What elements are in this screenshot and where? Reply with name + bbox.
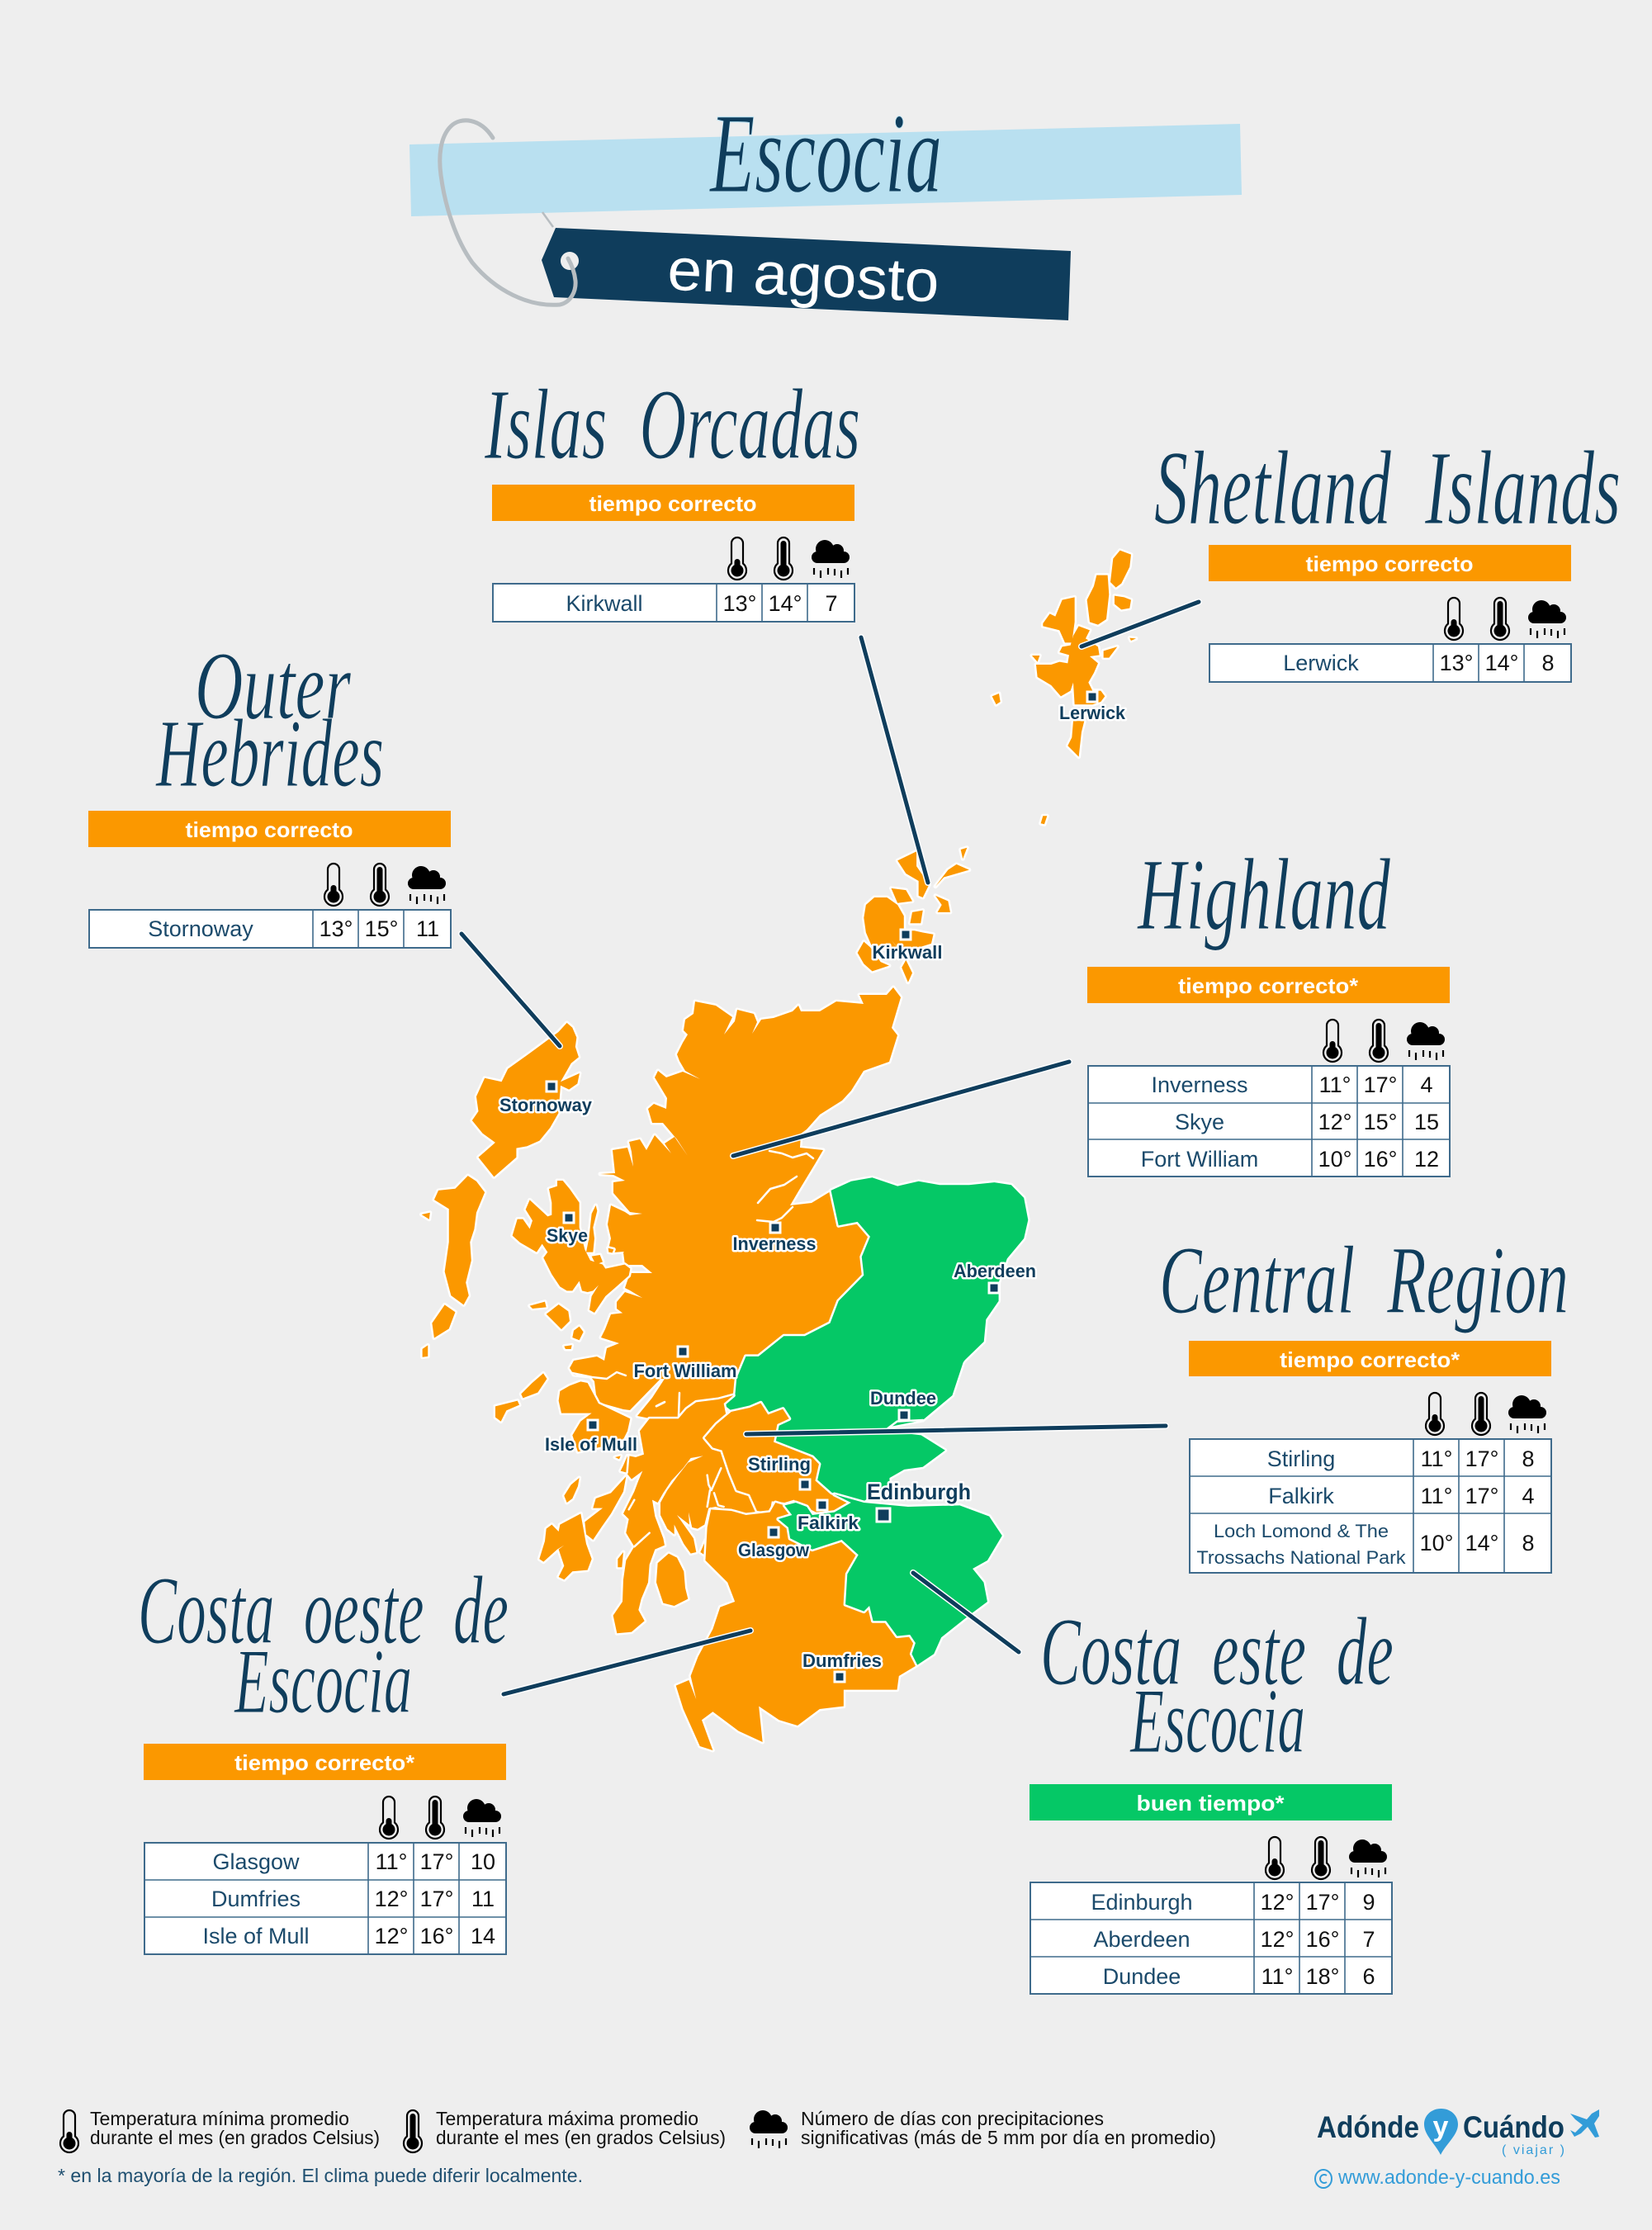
panel body: Islas Orcadas [492,485,854,622]
climate table [89,910,451,948]
label: Isle of Mull: Isle of Mull [545,1434,637,1455]
tag string short piece [542,212,553,227]
climate table: 13° [320,916,353,941]
status text: tiempo correcto* [1280,1347,1460,1372]
climate table: 12° [1261,1890,1294,1915]
climate table: 13° [723,591,756,616]
climate table: 7 [1362,1927,1375,1952]
status bar [492,485,854,521]
icon: maximum temperature [426,1797,444,1839]
climate table: 4 [1420,1072,1433,1097]
climate table: Loch Lomond & The [1214,1521,1389,1541]
icon: rain cloud [1508,1395,1546,1433]
connector: Central Region [746,1426,1166,1434]
climate table: 11° [1261,1964,1293,1989]
panel body: Central Region [1189,1341,1551,1573]
Outer Hebrides islands [422,1023,580,1357]
status bar [1209,545,1571,581]
status text: tiempo correcto* [1178,973,1359,998]
region: Shetland islands [992,551,1136,824]
panel: Shetland Islands [1154,429,1621,682]
panel: Highland [1087,838,1450,1177]
status text: buen tiempo* [1136,1791,1285,1816]
climate table: 14 [471,1924,495,1948]
climate table: 17° [420,1887,453,1911]
icon: maximum temperature [1312,1837,1330,1879]
climate table: Fort William [1141,1147,1258,1172]
climate table: 11° [1421,1484,1452,1508]
climate table: 6 [1362,1964,1375,1989]
tag: dark navy label [542,228,1071,320]
logo tagline: ( viajar ) [1502,2143,1564,2157]
title block [409,90,1242,320]
icon: rain cloud [408,866,446,904]
Islands: Mull, Colonsay, Jura, Islay, Gigha, Arran, Bute [539,1381,708,1606]
marker: Dundee [899,1410,909,1420]
icon: rain cloud [812,540,850,578]
region: Highland mainland [570,987,901,1418]
climate table: 7 [825,591,838,616]
climate table: 10 [471,1849,495,1874]
status text: tiempo correcto [589,491,756,516]
marker: Edinburgh [877,1508,890,1522]
label: Inverness: Inverness [733,1233,816,1254]
panel: Central Region [1159,1226,1569,1573]
status text: tiempo correcto* [234,1750,415,1775]
icon: rain cloud [463,1799,501,1837]
label: Stirling: Stirling [748,1454,811,1475]
climate table: 17° [1364,1072,1397,1097]
climate table: 12° [1261,1927,1294,1952]
title ribbon: light blue [409,124,1242,216]
climate table: 15 [1414,1110,1439,1134]
climate table: 8 [1522,1531,1535,1555]
icon: minimum temperature [380,1797,398,1839]
icon: rain cloud [1528,600,1566,638]
status bar [144,1744,506,1780]
connector: Costa oeste [504,1631,750,1694]
marker: Falkirk [817,1500,827,1510]
climate table: 12° [1318,1110,1351,1134]
heading: Costa este de: Costa este de [1040,1598,1394,1706]
Firth of Tay [888,1420,923,1428]
label: Stornoway: Stornoway [499,1095,593,1115]
label: Skye: Skye [547,1225,588,1246]
climate table: 16° [420,1924,453,1948]
climate table: 18° [1306,1964,1339,1989]
icon: maximum temperature [371,864,389,906]
footnote: * en la mayoría de la región. El clima puede diferir localmente. [58,2165,583,2186]
climate table: 11° [1421,1446,1452,1471]
climate table: 15° [365,916,398,941]
panel body: Shetland Islands [1209,545,1571,682]
panel body: Outer Hebrides [88,811,451,948]
icon: minimum temperature [1426,1393,1444,1435]
panel: Islas Orcadas [484,369,860,622]
marker: Aberdeen [989,1283,999,1293]
east coast region, north (green) [724,1177,1028,1501]
climate table: Falkirk [1268,1484,1334,1508]
icon: maximum temperature [1370,1020,1388,1062]
marker: Inverness [770,1223,780,1233]
heading: Escocia: Escocia [234,1631,412,1733]
legend text: maximum: Temperatura máxima promedio [436,2108,698,2129]
climate table [1209,644,1571,682]
icon: maximum temperature [774,537,793,580]
marker: Dumfries [835,1672,845,1682]
label: Aberdeen: Aberdeen [954,1261,1036,1281]
icon: minimum temperature [60,2110,78,2152]
climate table [1030,1882,1392,1994]
connector: Highland [733,1062,1069,1156]
climate table: Lerwick [1283,651,1359,675]
region: Argyll and Inner Hebrides [539,1381,772,1633]
icon: maximum temperature [404,2110,422,2152]
climate table: 11 [416,916,439,941]
heading: Highland: Highland [1137,838,1391,951]
icon: airplane [1570,2109,1599,2138]
subtitle: en agosto: en agosto [666,237,940,315]
marker: Stornoway [547,1082,556,1091]
climate table: Kirkwall [566,591,643,616]
climate table: Dumfries [211,1887,301,1911]
icon: minimum temperature [1323,1020,1342,1062]
marker: Isle of Mull [588,1420,598,1430]
status bar [1030,1784,1392,1820]
logo word: Adónde: Adónde [1317,2110,1419,2144]
panel body: Costa oeste [144,1744,506,1954]
marker: Skye [564,1213,574,1223]
climate table [493,584,854,622]
climate table: 13° [1440,651,1473,675]
label: Glasgow: Glasgow [738,1540,810,1560]
label: Lerwick: Lerwick [1059,703,1126,723]
panel: Outer Hebrides [88,632,451,948]
climate table: 16° [1306,1927,1339,1952]
climate table: 14° [769,591,802,616]
region: Skye and small isles [513,1181,630,1349]
climate table: 10° [1420,1531,1453,1555]
legend text: rain days: significativas (más de 5 mm por día en promedio) [801,2127,1216,2148]
icon: minimum temperature [1266,1837,1284,1879]
status bar [1087,967,1450,1003]
heading: Hebrides: Hebrides [155,699,384,807]
connector: Shetland Islands [1082,602,1199,646]
marker: Lerwick [1087,692,1097,702]
panel body: Highland [1087,967,1450,1177]
heading: Outer: Outer [195,632,352,740]
climate table: 17° [1465,1446,1498,1471]
status text: tiempo correcto [1306,552,1473,576]
climate table: 14° [1485,651,1518,675]
icon: rain cloud [1349,1839,1387,1877]
climate table: 17° [1306,1890,1339,1915]
climate table: 8 [1522,1446,1535,1471]
climate table: 17° [1465,1484,1498,1508]
icon: map pin with y [1424,2109,1458,2155]
climate table: Glasgow [212,1849,300,1874]
climate table: Stornoway [148,916,253,941]
Orkney islands [858,848,969,982]
icon: rain cloud [1407,1022,1445,1060]
climate table: Inverness [1151,1072,1248,1097]
legend [58,2108,1216,2186]
firths and sea lochs [572,1151,813,1416]
label: Kirkwall: Kirkwall [872,942,943,963]
label: Dundee: Dundee [870,1388,936,1409]
status bar [1189,1341,1551,1376]
Tiree and Coll [495,1373,547,1422]
climate table: 4 [1522,1484,1535,1508]
climate table: Aberdeen [1093,1927,1190,1952]
icon: minimum temperature [1445,598,1463,640]
region: central and southern Scotland [495,1373,1002,1750]
marker: Fort William [678,1347,688,1356]
marker: Stirling [800,1480,810,1489]
Argyll inner lochs [629,1402,724,1546]
panel: Costa oeste de Escocia [138,1556,509,1954]
region: Orkney and Outer Hebrides [422,848,1028,1501]
legend text: minimum: Temperatura mínima promedio [90,2108,349,2129]
icon: minimum temperature [324,864,343,906]
label: Falkirk: Falkirk [798,1513,859,1533]
icon: maximum temperature [1491,598,1509,640]
climate table [144,1843,506,1954]
climate table: 8 [1541,651,1555,675]
heading: Costa oeste de: Costa oeste de [138,1556,509,1664]
status text: tiempo correcto [185,817,353,842]
map of Scotland [422,551,1136,1750]
connector: Outer Hebrides [462,934,560,1046]
icon: minimum temperature [728,537,746,580]
climate table: 15° [1364,1110,1397,1134]
West coast south: Glasgow and Dumfries [676,1503,917,1750]
logo: Adónde y Cuándo [1315,2109,1599,2189]
tag string loop [440,121,575,305]
title: Escocia: Escocia [709,90,942,216]
climate table: Edinburgh [1091,1890,1193,1915]
connector: Islas Orcadas [861,637,928,883]
marker: Kirkwall [901,930,911,940]
climate table: Trossachs National Park [1197,1547,1407,1568]
icon: copyright [1315,2170,1332,2188]
climate table: 12° [375,1887,408,1911]
climate table: 12° [375,1924,408,1948]
connector: Costa este [913,1573,1019,1652]
legend text: rain days: Número de días con precipitaciones [801,2108,1104,2129]
logo word: Cuándo: Cuándo [1463,2110,1564,2144]
climate table: 9 [1362,1890,1375,1915]
climate table: 16° [1364,1147,1397,1172]
climate table: Skye [1175,1110,1224,1134]
climate table: 14° [1465,1531,1498,1555]
climate table: Dundee [1103,1964,1181,1989]
climate table: Stirling [1267,1446,1335,1471]
climate table: 17° [420,1849,453,1874]
label: Edinburgh: Edinburgh [867,1480,971,1504]
climate table: 11° [1319,1072,1351,1097]
climate table: 11 [471,1887,495,1911]
climate table: Isle of Mull [202,1924,310,1948]
panel: Costa este de Escocia [1030,1598,1394,1994]
climate table: 11° [376,1849,407,1874]
status bar [88,811,451,847]
heading: Escocia: Escocia [1129,1670,1305,1773]
label: Dumfries: Dumfries [802,1650,882,1671]
climate table: 10° [1318,1147,1351,1172]
website: www.adonde-y-cuando.es [1337,2166,1560,2189]
climate table [1190,1439,1551,1573]
marker: Glasgow [769,1527,779,1537]
Central Region [705,1403,851,1513]
city markers and labels [499,692,1126,1682]
Argyll, Knapdale, Kintyre and Cowal [613,1395,772,1633]
label: Fort William: Fort William [634,1361,736,1381]
icon: rain cloud [750,2110,788,2148]
East coast lower region (green) [779,1494,1002,1665]
connector lines [462,602,1199,1694]
climate table [1088,1066,1450,1177]
legend text: minimum: durante el mes (en grados Celsius) [90,2127,380,2148]
climate table: 12 [1414,1147,1439,1172]
icon: map pin with y: y [1433,2111,1449,2142]
legend text: maximum: durante el mes (en grados Celsius) [436,2127,726,2148]
panel body: Costa este [1030,1784,1392,1994]
heading: Islas Orcadas: Islas Orcadas [484,369,860,481]
icon: maximum temperature [1472,1393,1490,1435]
